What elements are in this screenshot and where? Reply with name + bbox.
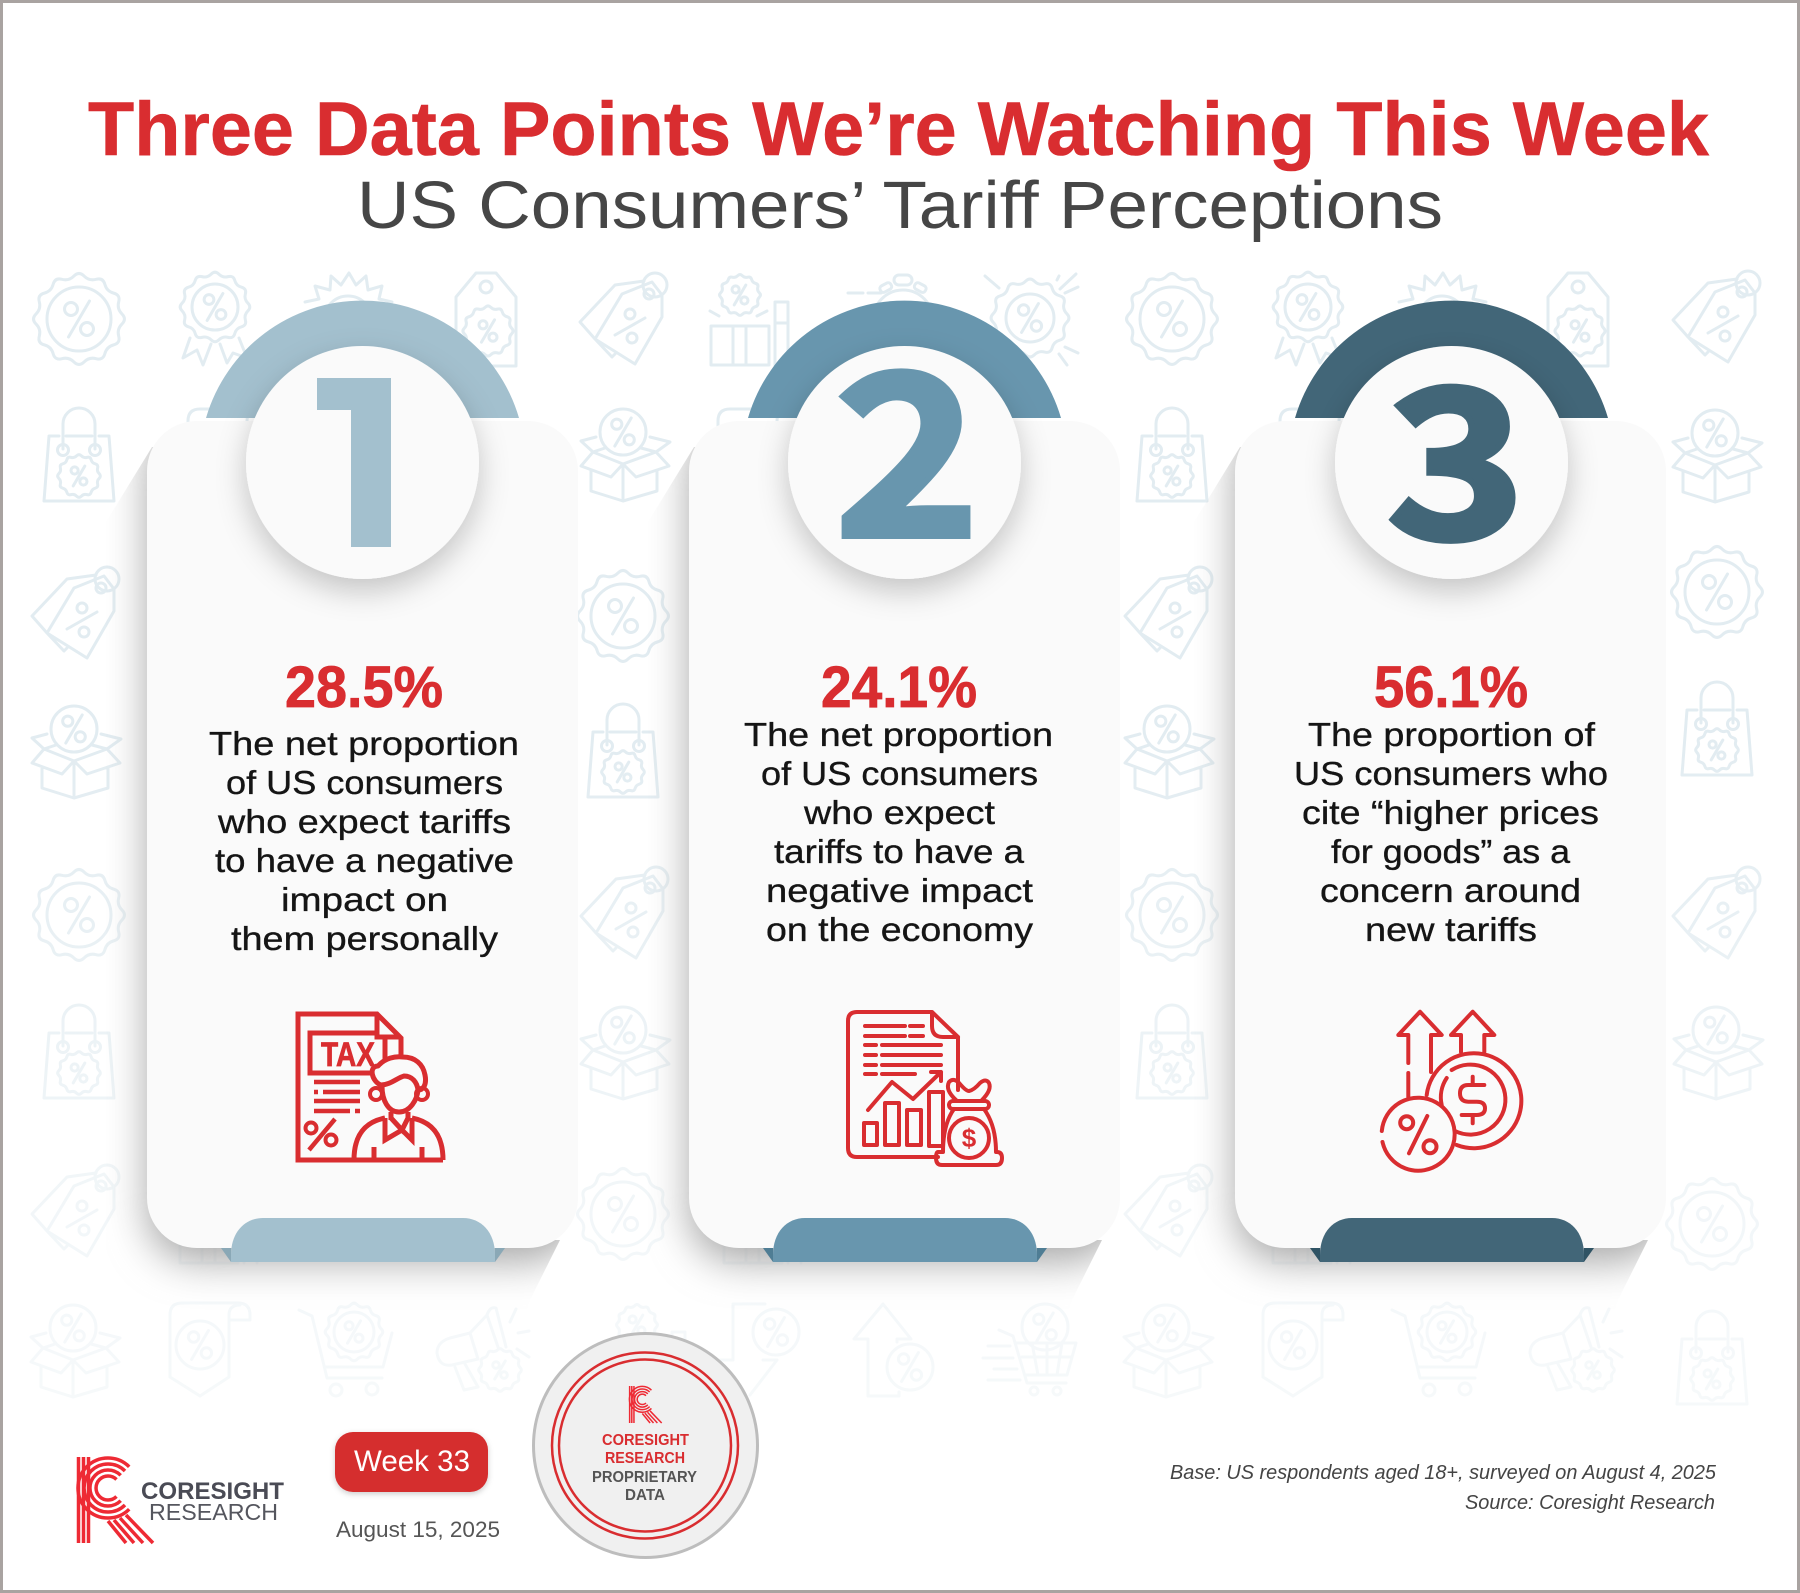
bottom tab [221, 1218, 505, 1262]
description: negative impact [766, 872, 1033, 909]
panel: card 2 [689, 276, 1120, 1262]
icon: tax document and person [298, 1014, 443, 1160]
background icon pattern [31, 271, 1763, 1404]
bottom tab [1310, 1218, 1594, 1262]
description: them personally [231, 920, 499, 957]
stat 28.5%: 28.5% [285, 655, 443, 720]
seal text [592, 1432, 697, 1504]
description: of US consumers [761, 755, 1038, 792]
week badge [335, 1432, 488, 1492]
description: concern around [1320, 872, 1581, 909]
seal text: RESEARCH [605, 1450, 685, 1467]
description: The proportion of [1308, 716, 1596, 753]
stat 24.1%: 24.1% [821, 655, 977, 720]
description: The net proportion [209, 725, 519, 762]
seal text: PROPRIETARY [592, 1469, 697, 1486]
card body [689, 421, 1120, 1248]
card shadow [1235, 421, 1666, 1262]
icon: report with money bag: $ [962, 1123, 977, 1153]
description: who expect [803, 794, 995, 831]
description [1294, 716, 1608, 948]
card shadow [147, 421, 578, 1262]
seal logo [629, 1386, 662, 1423]
number 1: 1 [272, 309, 444, 656]
week badge: Week 33 [354, 1445, 470, 1478]
seal text: CORESIGHT [602, 1432, 689, 1449]
logo wordmark [141, 1478, 284, 1525]
description: tariffs to have a [774, 833, 1025, 870]
description: to have a negative [215, 842, 514, 879]
footer: Coresight Research logo [78, 1457, 284, 1543]
description: The net proportion [744, 716, 1053, 753]
arc [206, 301, 519, 418]
description [744, 716, 1053, 948]
title line 2: US Consumers’ Tariff Perceptions [357, 168, 1443, 243]
description: impact on [281, 881, 448, 918]
card shadow [689, 421, 1120, 1262]
description: who expect tariffs [217, 803, 511, 840]
card body [147, 421, 578, 1248]
description: on the economy [766, 911, 1034, 948]
icon: rising prices arrows, coin and percent [1382, 1012, 1521, 1171]
number 2: 2 [834, 276, 980, 601]
stat 56.1%: 56.1% [1374, 655, 1528, 720]
logo wordmark: CORESIGHT [141, 1478, 284, 1505]
date: August 15, 2025 [336, 1517, 500, 1542]
proprietary data seal [534, 1334, 758, 1558]
number 3: 3 [1387, 299, 1525, 598]
title line 1: Three Data Points We’re Watching This Week [88, 87, 1710, 172]
description: for goods” as a [1331, 833, 1571, 870]
source note: Source: Coresight Research [1465, 1492, 1715, 1514]
seal text: DATA [625, 1487, 665, 1504]
icon: tax document and person: TAX [321, 1036, 375, 1074]
source note: Base: US respondents aged 18+, surveyed on August 4, 2025 [1170, 1462, 1717, 1484]
panel: card 3 [1235, 299, 1666, 1262]
panel: card 1 [147, 301, 578, 1262]
bottom tab [763, 1218, 1047, 1262]
arc [748, 301, 1061, 418]
description [209, 725, 519, 957]
description: new tariffs [1365, 911, 1537, 948]
icon: report with money bag [848, 1012, 1002, 1165]
title [88, 87, 1710, 243]
description: US consumers who [1294, 755, 1608, 792]
source note [1170, 1462, 1717, 1514]
number circle [246, 346, 479, 579]
description: cite “higher prices [1302, 794, 1599, 831]
arc [1295, 301, 1608, 418]
card body [1235, 421, 1666, 1248]
number circle [788, 346, 1021, 579]
description: of US consumers [226, 764, 503, 801]
logo wordmark: RESEARCH [149, 1499, 278, 1525]
number circle [1335, 346, 1568, 579]
logo mark [78, 1457, 153, 1543]
